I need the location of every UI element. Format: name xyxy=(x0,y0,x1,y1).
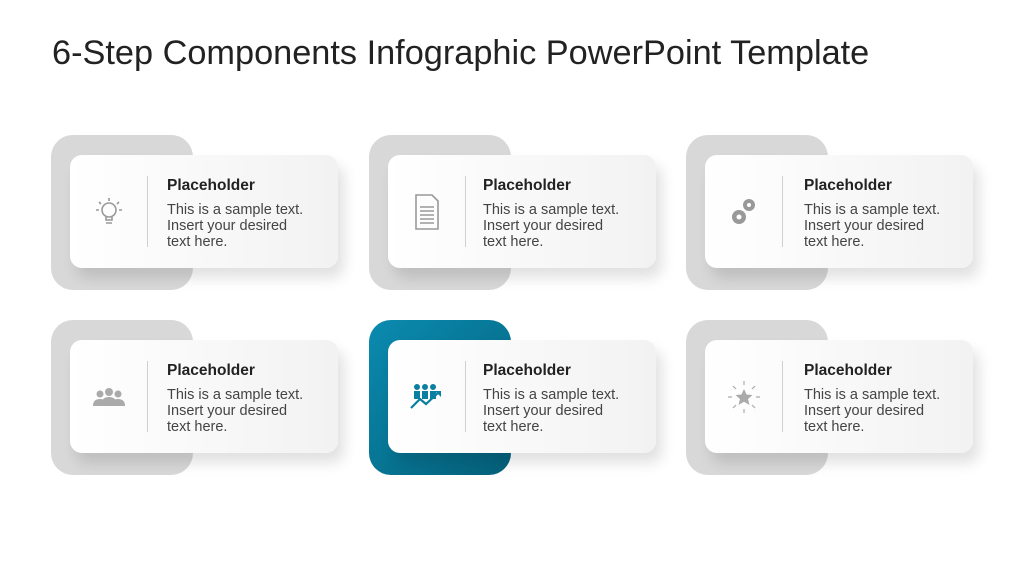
text: step 4: This is a sample text. xyxy=(167,387,303,403)
text: step 1: This is a sample text. xyxy=(167,202,303,218)
text: step 2: This is a sample text. xyxy=(483,202,619,218)
text: step 1: text here. xyxy=(167,234,227,250)
text: step 5: Placeholder xyxy=(483,362,571,379)
icon: lightbulb xyxy=(96,198,122,224)
text: step 4: Placeholder xyxy=(167,362,255,379)
text: step 1 xyxy=(167,177,303,250)
icon: gears xyxy=(732,199,755,224)
panel: step 3 xyxy=(686,135,983,290)
panel: step 6 xyxy=(686,320,983,475)
text: step 4: text here. xyxy=(167,419,227,435)
panel: step 2 xyxy=(369,135,666,290)
text: step 6: This is a sample text. xyxy=(804,387,940,403)
text: step 2: Insert your desired xyxy=(483,218,603,234)
text: step 6 xyxy=(804,362,940,435)
text: step 3: This is a sample text. xyxy=(804,202,940,218)
text: step 5: This is a sample text. xyxy=(483,387,619,403)
panel: step 5 (highlighted) xyxy=(369,320,666,475)
text: step 2 xyxy=(483,177,619,250)
text: step 1: Insert your desired xyxy=(167,218,287,234)
icon: team growth xyxy=(410,384,441,409)
text: step 3: Placeholder xyxy=(804,177,892,194)
icon: document xyxy=(415,194,439,230)
text: step 1: Placeholder xyxy=(167,177,255,194)
text: step 2: Placeholder xyxy=(483,177,571,194)
text: step 5: Insert your desired xyxy=(483,403,603,419)
panel: step 4 xyxy=(51,320,348,475)
text: step 5: text here. xyxy=(483,419,543,435)
icon: group xyxy=(93,388,125,406)
text: step 3: Insert your desired xyxy=(804,218,924,234)
icon: star burst xyxy=(728,381,760,413)
text: step 3 xyxy=(804,177,940,250)
text: step 3: text here. xyxy=(804,234,864,250)
text: step 6: Placeholder xyxy=(804,362,892,379)
text: step 4 xyxy=(167,362,303,435)
text: step 2: text here. xyxy=(483,234,543,250)
text: step 5 xyxy=(483,362,619,435)
text: step 4: Insert your desired xyxy=(167,403,287,419)
panel: step 1 xyxy=(51,135,348,290)
text: step 6: Insert your desired xyxy=(804,403,924,419)
title: 6-Step Components Infographic PowerPoint Template xyxy=(52,34,869,72)
text: step 6: text here. xyxy=(804,419,864,435)
